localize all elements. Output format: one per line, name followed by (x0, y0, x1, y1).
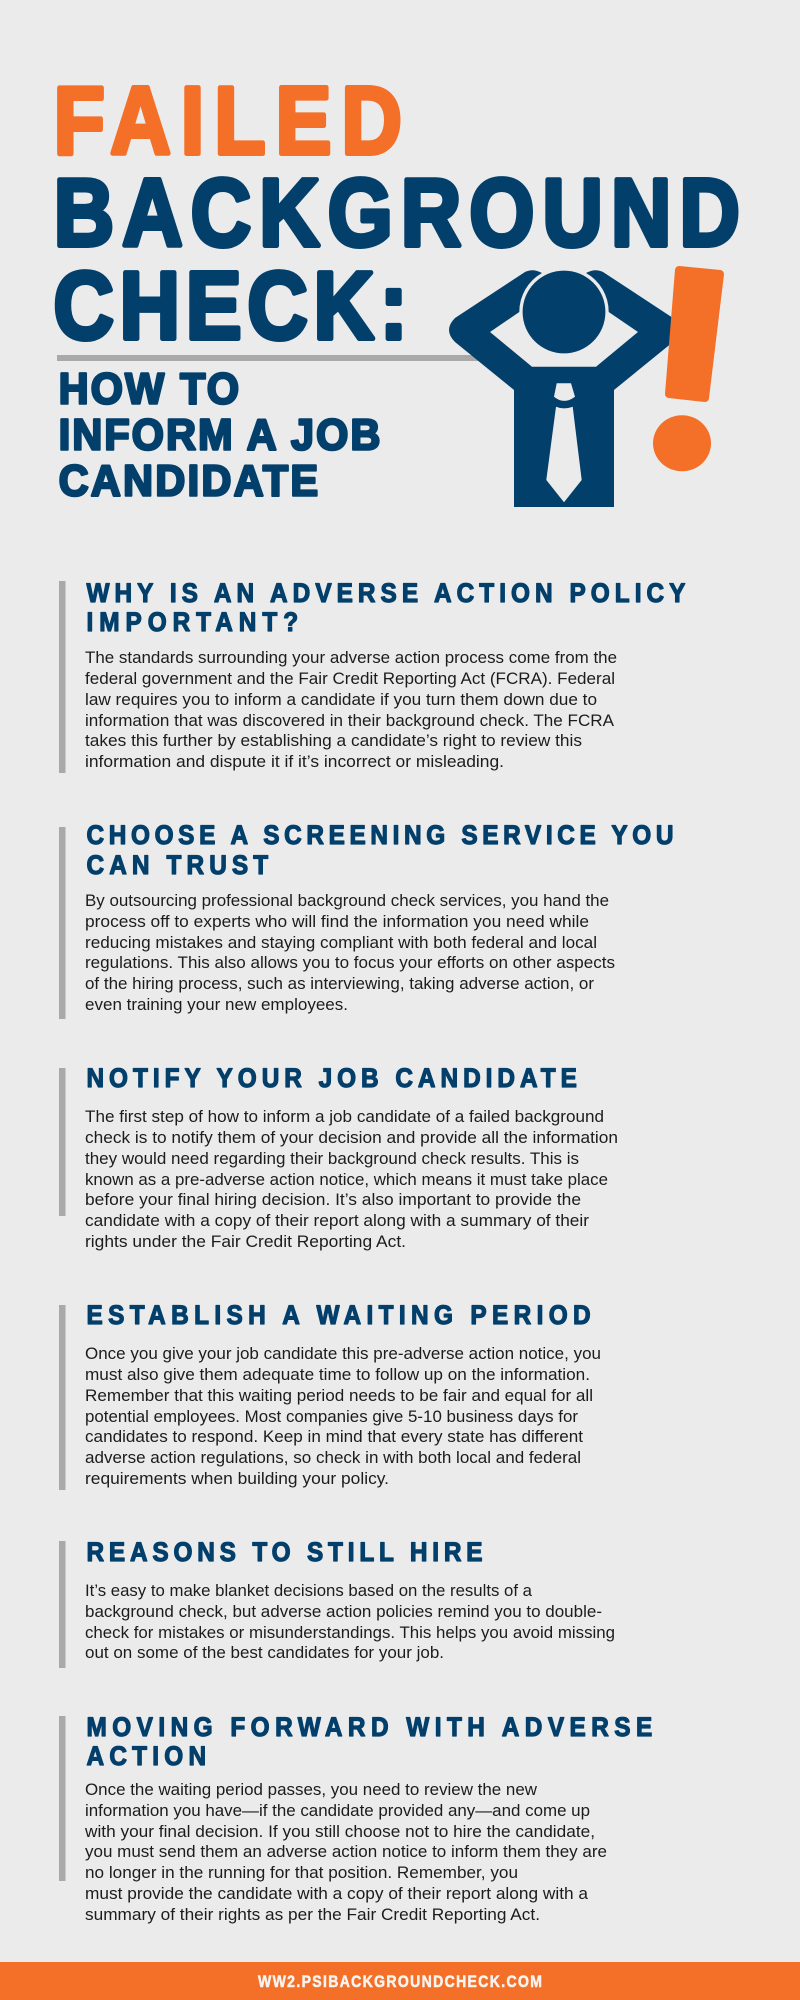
header: title block (54, 68, 740, 360)
body text: even training your new employees. (85, 996, 348, 1014)
subtitle: INFORM A JOB (59, 411, 380, 459)
body text: information that was discovered in their background check. The FCRA (85, 712, 614, 730)
title: CHECK:: CHECK: (54, 253, 408, 360)
body text: The first step of how to inform a job candidate of a failed background (85, 1108, 604, 1126)
title: FAILED: FAILED (54, 68, 402, 175)
panel: establish a waiting period (59, 1301, 601, 1490)
section bar (59, 1716, 66, 1881)
body text: before your final hiring decision. It’s also important to provide the (85, 1191, 581, 1209)
section bar (59, 1305, 66, 1490)
body text (85, 1108, 618, 1251)
body text (85, 1582, 615, 1662)
figure body and arms (449, 270, 679, 507)
body text: no longer in the running for that position. Remember, you (85, 1864, 518, 1882)
body text: takes this further by establishing a candidate’s right to review this (85, 732, 582, 750)
body text: law requires you to inform a candidate if you turn them down due to (85, 691, 597, 709)
subtitle: CANDIDATE (59, 457, 318, 505)
section bar (59, 1068, 66, 1216)
footer url: WW2.PSIBACKGROUNDCHECK.COM (258, 1973, 542, 1991)
icon: stressed businessman with hands behind head (449, 270, 679, 507)
section bar (59, 827, 66, 1019)
body text (85, 649, 617, 771)
heading: NOTIFY YOUR JOB CANDIDATE (86, 1064, 577, 1093)
body text: known as a pre-adverse action notice, which means it must take place (85, 1171, 608, 1189)
heading: CAN TRUST (86, 851, 269, 880)
heading: ESTABLISH A WAITING PERIOD (86, 1301, 591, 1330)
body text: background check, but adverse action policies remind you to double- (85, 1603, 602, 1621)
body text: they would need regarding their background check results. This is (85, 1150, 579, 1168)
heading: CHOOSE A SCREENING SERVICE YOU (86, 821, 673, 850)
body text: federal government and the Fair Credit Reporting Act (FCRA). Federal (85, 670, 615, 688)
body text: rights under the Fair Credit Reporting Act. (85, 1233, 406, 1251)
body text: Once the waiting period passes, you need to review the new (85, 1781, 537, 1799)
divider rule (57, 355, 487, 361)
heading: MOVING FORWARD WITH ADVERSE (86, 1713, 652, 1742)
body text: candidate with a copy of their report along with a summary of their (85, 1212, 590, 1230)
body text: potential employees. Most companies give 5-10 business days for (85, 1408, 579, 1426)
body text: out on some of the best candidates for your job. (85, 1644, 444, 1662)
panel: reasons to still hire (59, 1538, 615, 1668)
body text: requirements when building your policy. (85, 1470, 389, 1488)
title: BACKGROUND: BACKGROUND (54, 160, 740, 267)
panel: moving forward with adverse action (59, 1713, 652, 1924)
body text: candidates to respond. Keep in mind that every state has different (85, 1428, 583, 1446)
section bar (59, 581, 66, 773)
body text: adverse action regulations, so check in with both local and federal (85, 1449, 581, 1467)
body text: It’s easy to make blanket decisions based on the results of a (85, 1582, 533, 1600)
heading: WHY IS AN ADVERSE ACTION POLICY (86, 579, 685, 608)
body text: Once you give your job candidate this pre-adverse action notice, you (85, 1345, 601, 1363)
body text: must also give them adequate time to follow up on the information. (85, 1366, 590, 1384)
body text: check for mistakes or misunderstandings. This helps you avoid missing (85, 1624, 615, 1642)
body text: summary of their rights as per the Fair Credit Reporting Act. (85, 1906, 540, 1924)
subtitle: HOW TO (59, 365, 239, 413)
panel: why is an adverse action policy important (59, 579, 685, 773)
body text (84, 1781, 607, 1924)
body text: you must send them an adverse action notice to inform them they are (85, 1843, 607, 1861)
body text: reducing mistakes and staying compliant with both federal and local (85, 934, 597, 952)
body text: of the hiring process, such as interviewing, taking adverse action, or (85, 975, 595, 993)
body text: check is to notify them of your decision and provide all the information (85, 1129, 618, 1147)
body text (85, 892, 615, 1014)
body text: By outsourcing professional background check services, you hand the (85, 892, 609, 910)
body text: The standards surrounding your adverse action process come from the (85, 649, 617, 667)
body text (85, 1345, 601, 1488)
footer band (0, 1962, 800, 2000)
heading (86, 821, 673, 880)
panel: notify your job candidate (59, 1064, 618, 1251)
body text: regulations. This also allows you to focus your efforts on other aspects (85, 954, 615, 972)
heading (86, 1713, 652, 1771)
body text: information and dispute it if it’s incorrect or misleading. (85, 753, 504, 771)
body text: Remember that this waiting period needs to be fair and equal for all (85, 1387, 593, 1405)
figure head (523, 271, 605, 353)
heading: REASONS TO STILL HIRE (86, 1538, 483, 1567)
heading: ACTION (86, 1742, 206, 1771)
body text: information you have—if the candidate provided any—and come up (85, 1802, 590, 1820)
subtitle (59, 365, 380, 505)
body text: must provide the candidate with a copy of their report along with a (85, 1885, 589, 1903)
tie (546, 407, 582, 502)
body text: with your final decision. If you still choose not to hire the candidate, (84, 1823, 595, 1841)
icon: exclamation mark (653, 270, 720, 471)
heading: IMPORTANT? (86, 608, 298, 637)
heading (86, 579, 685, 637)
panel: choose a screening service you can trust (59, 821, 673, 1019)
tie knot (554, 383, 575, 401)
body text: process off to experts who will find the information you need while (85, 913, 589, 931)
section bar (59, 1541, 66, 1668)
